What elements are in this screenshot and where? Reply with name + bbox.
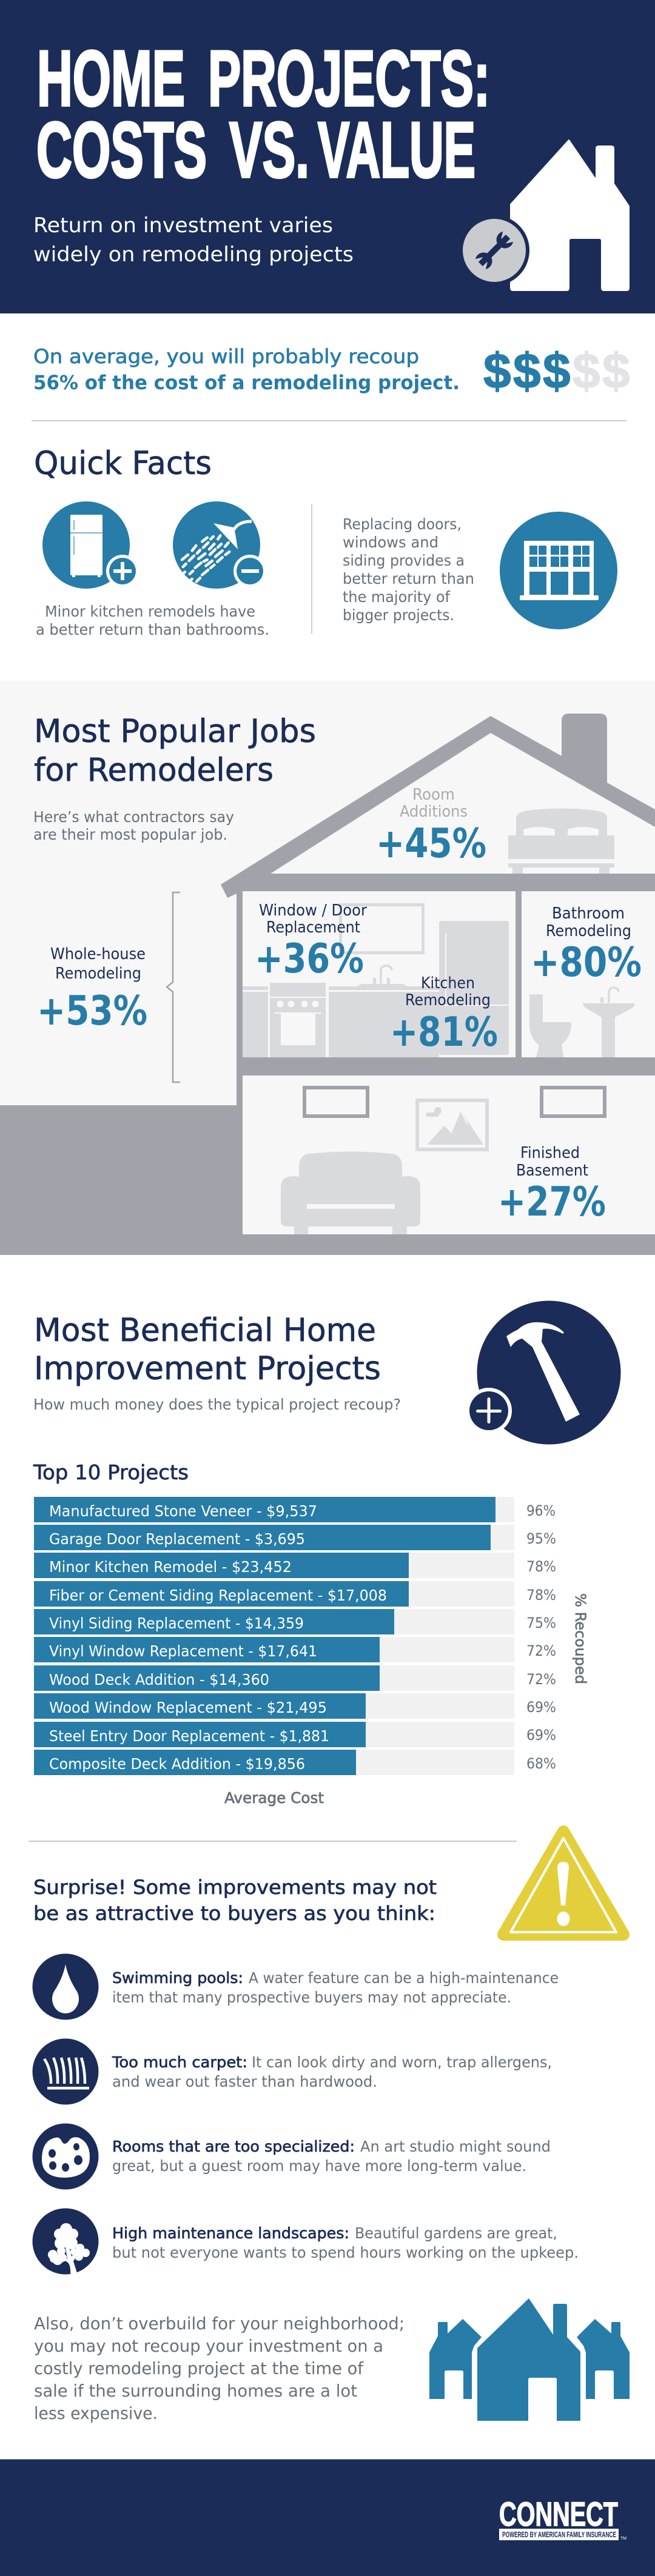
- bar chart: top 10 projects: 95%: [526, 1530, 556, 1547]
- text: landscapes: High maintenance landscapes:: [112, 2224, 349, 2242]
- text: don't overbuild: [34, 2313, 405, 2423]
- stat: kitchen remodeling: [390, 974, 498, 1055]
- stat: room additions: +45%: [376, 820, 486, 867]
- text: don't overbuild: less expensive.: [34, 2403, 158, 2423]
- heading: surprise: Surprise! Some improvements may not: [33, 1876, 437, 1899]
- stat: room additions: Additions: [400, 803, 468, 821]
- bar chart: top 10 projects: Manufactured Stone Veneer - $9,537: [49, 1502, 317, 1520]
- heading: most beneficial: Most Beneficial Home: [34, 1312, 376, 1349]
- kitchen fixtures: [243, 905, 509, 1057]
- title: PROJECTS:: [208, 34, 490, 122]
- icon: carpet: [33, 2038, 98, 2105]
- icon: water drop: [33, 1953, 98, 2020]
- panel: quick facts: [34, 445, 617, 638]
- text: specialized rooms: An art studio might sound: [360, 2138, 551, 2155]
- title: HOME: [37, 34, 185, 122]
- stat: whole-house remodeling: Remodeling: [55, 965, 141, 983]
- bar chart: top 10 projects: [34, 1497, 556, 1775]
- text: specialized rooms: great, but a guest room may have more long-term value.: [112, 2157, 526, 2175]
- item: high maintenance landscapes: [33, 2208, 579, 2275]
- stat: whole-house remodeling: +53%: [37, 987, 147, 1034]
- heading: most popular jobs: for Remodelers: [34, 752, 274, 789]
- text: doors windows siding: [343, 515, 474, 624]
- text: kitchen vs bathrooms: Minor kitchen remodels have: [45, 603, 255, 620]
- heading: top 10 projects: Top 10 Projects: [33, 1460, 189, 1484]
- bar chart: top 10 projects: Steel Entry Door Replacement - $1,881: [49, 1727, 329, 1745]
- heading: quick facts: Quick Facts: [34, 445, 212, 482]
- subtitle: widely on remodeling projects: [33, 243, 354, 267]
- text: contractors intro: Here’s what contractors say: [33, 808, 234, 826]
- subtitle: Return on investment varies: [33, 213, 333, 238]
- bar chart: top 10 projects: 72%: [526, 1642, 556, 1659]
- title: COSTS: [36, 105, 207, 194]
- stat: window door replacement: [255, 902, 367, 982]
- text: doors windows siding: windows and: [343, 534, 438, 551]
- icon: dollar signs: $: [573, 344, 600, 399]
- heading: surprise: [33, 1876, 437, 1925]
- bar chart: top 10 projects: 68%: [526, 1755, 556, 1772]
- stat: kitchen remodeling: Remodeling: [405, 991, 491, 1009]
- text: swimming pools: A water feature can be a high-maintenance: [249, 1969, 559, 1987]
- icon: shower minus: [173, 501, 266, 589]
- heading: most beneficial: Improvement Projects: [34, 1350, 381, 1387]
- text: too much carpet: and wear out faster than hardwood.: [112, 2073, 377, 2090]
- item: specialized rooms: [33, 2123, 551, 2190]
- stat: kitchen remodeling: Kitchen: [421, 974, 475, 992]
- stat: finished basement: Finished: [520, 1144, 580, 1162]
- bar chart: top 10 projects: Vinyl Window Replacement - $17,641: [49, 1642, 317, 1660]
- icon: framed picture: [417, 1100, 487, 1149]
- text: doors windows siding: better return than: [343, 570, 474, 587]
- text: contractors intro: [33, 808, 234, 843]
- text: landscapes: but not everyone wants to spend hours working on the upkeep.: [112, 2244, 579, 2261]
- bar chart: top 10 projects: Wood Deck Addition - $14,360: [49, 1671, 269, 1688]
- stat: finished basement: [498, 1144, 606, 1225]
- icon: dollar signs: $: [543, 344, 571, 399]
- bar chart: top 10 projects: Vinyl Siding Replacement - $14,359: [49, 1614, 304, 1632]
- stat: room additions: [376, 786, 486, 867]
- bar chart: top 10 projects: Wood Window Replacement - $21,495: [49, 1699, 327, 1716]
- text: kitchen vs bathrooms: [36, 603, 269, 638]
- panel: surprise improvements: [33, 1832, 630, 2423]
- axis label: average cost: Average Cost: [224, 1789, 324, 1807]
- bar chart: top 10 projects: Fiber or Cement Siding Replacement - $17,008: [49, 1587, 387, 1604]
- bar chart: top 10 projects: Minor Kitchen Remodel - $23,452: [49, 1558, 292, 1576]
- subtitle: [33, 213, 354, 267]
- text: don't overbuild: costly remodeling project at the time of: [34, 2358, 364, 2378]
- text: swimming pools: [112, 1969, 559, 2006]
- heading: most popular jobs: [34, 713, 316, 789]
- icon: neighborhood houses: [429, 2298, 630, 2421]
- title: VS.: [229, 105, 309, 194]
- callout: average recoup: On average, you will probably recoup: [33, 345, 419, 368]
- icon: dollar signs: [483, 344, 630, 399]
- icon: bed: [508, 809, 614, 874]
- icon: hammer plus: [466, 1301, 621, 1444]
- bracket: whole-house span: [167, 892, 180, 1082]
- icon: dollar signs: $: [483, 344, 511, 399]
- stat: kitchen remodeling: +81%: [390, 1008, 498, 1055]
- title: [36, 34, 490, 194]
- stat: bathroom remodeling: Bathroom: [552, 905, 625, 923]
- text: swimming pools: item that many prospective buyers may not appreciate.: [112, 1989, 511, 2006]
- bar chart: top 10 projects: 75%: [526, 1614, 556, 1631]
- text: don't overbuild: you may not recoup your investment on a: [34, 2336, 383, 2356]
- callout: average recoup: [33, 345, 460, 394]
- text: doors windows siding: the majority of: [343, 588, 451, 606]
- icon: dollar signs: $: [513, 344, 541, 399]
- text: kitchen vs bathrooms: a better return than bathrooms.: [36, 621, 269, 638]
- text: swimming pools: Swimming pools:: [112, 1969, 243, 1987]
- panel: header: [0, 0, 655, 313]
- bar chart: top 10 projects: 69%: [526, 1699, 556, 1716]
- icon: warning triangle: [503, 1832, 623, 1935]
- icon: window: [500, 512, 617, 629]
- bar chart: top 10 projects: Garage Door Replacement - $3,695: [49, 1530, 305, 1548]
- icon: sofa: [281, 1152, 420, 1234]
- heading: most beneficial: [34, 1312, 381, 1387]
- panel: footer: [0, 2459, 655, 2576]
- stat: window door replacement: Replacement: [266, 918, 360, 937]
- text: doors windows siding: siding provides a: [343, 552, 465, 569]
- text: too much carpet: It can look dirty and worn, trap allergens,: [252, 2053, 552, 2071]
- stat: finished basement: +27%: [498, 1178, 606, 1225]
- icon: dollar signs: $: [602, 344, 630, 399]
- bar chart: top 10 projects: 96%: [526, 1502, 556, 1519]
- text: landscapes: [112, 2224, 579, 2261]
- bar chart: top 10 projects: 78%: [526, 1558, 556, 1575]
- panel: most popular jobs: [0, 681, 655, 1255]
- title: VALUE: [318, 105, 475, 194]
- bar chart: top 10 projects: Composite Deck Addition - $19,856: [49, 1755, 305, 1773]
- text: doors windows siding: bigger projects.: [343, 606, 454, 624]
- logo: connect: TM: [620, 2537, 626, 2541]
- icon: house with wrench: [459, 140, 629, 290]
- item: swimming pools: [33, 1953, 559, 2020]
- callout: average recoup: 56% of the cost of a remodeling project.: [33, 371, 460, 394]
- text: contractors intro: are their most popular job.: [33, 826, 227, 843]
- stat: window door replacement: Window / Door: [259, 902, 367, 920]
- text: doors windows siding: Replacing doors,: [343, 515, 462, 533]
- basement windows: [304, 1088, 605, 1116]
- stat: whole-house remodeling: Whole-house: [50, 945, 146, 963]
- text: specialized rooms: Rooms that are too specialized:: [112, 2138, 355, 2155]
- bar chart: top 10 projects: 72%: [526, 1671, 556, 1688]
- text: too much carpet: [112, 2053, 552, 2090]
- stat: window door replacement: +36%: [255, 935, 364, 982]
- text: specialized rooms: [112, 2138, 551, 2175]
- heading: surprise: be as attractive to buyers as you think:: [33, 1902, 435, 1925]
- bathroom fixtures: [529, 988, 635, 1057]
- text: don't overbuild: sale if the surrounding homes are a lot: [34, 2381, 357, 2401]
- stat: whole-house remodeling: [37, 945, 147, 1034]
- stat: bathroom remodeling: [531, 905, 642, 986]
- icon: refrigerator plus: [42, 501, 139, 589]
- text: how much money: How much money does the typical project recoup?: [33, 1396, 401, 1413]
- text: don't overbuild: Also, don’t overbuild for your neighborhood;: [34, 2313, 405, 2333]
- bar chart: top 10 projects: 78%: [526, 1587, 556, 1604]
- icon: paint palette: [33, 2123, 98, 2190]
- house cross-section: [0, 714, 655, 1255]
- heading: most popular jobs: Most Popular Jobs: [34, 713, 316, 750]
- text: too much carpet: Too much carpet:: [112, 2053, 247, 2071]
- stat: bathroom remodeling: Remodeling: [546, 922, 631, 940]
- item: too much carpet: [33, 2038, 552, 2105]
- panel: most beneficial projects: [33, 1301, 620, 1807]
- bar chart: top 10 projects: 69%: [526, 1727, 556, 1744]
- stat: room additions: Room: [412, 786, 455, 804]
- text: landscapes: Beautiful gardens are great,: [355, 2224, 557, 2242]
- icon: tree: [33, 2208, 98, 2275]
- stat: finished basement: Basement: [516, 1162, 588, 1180]
- axis label: percent recouped: % Recouped: [572, 1593, 589, 1684]
